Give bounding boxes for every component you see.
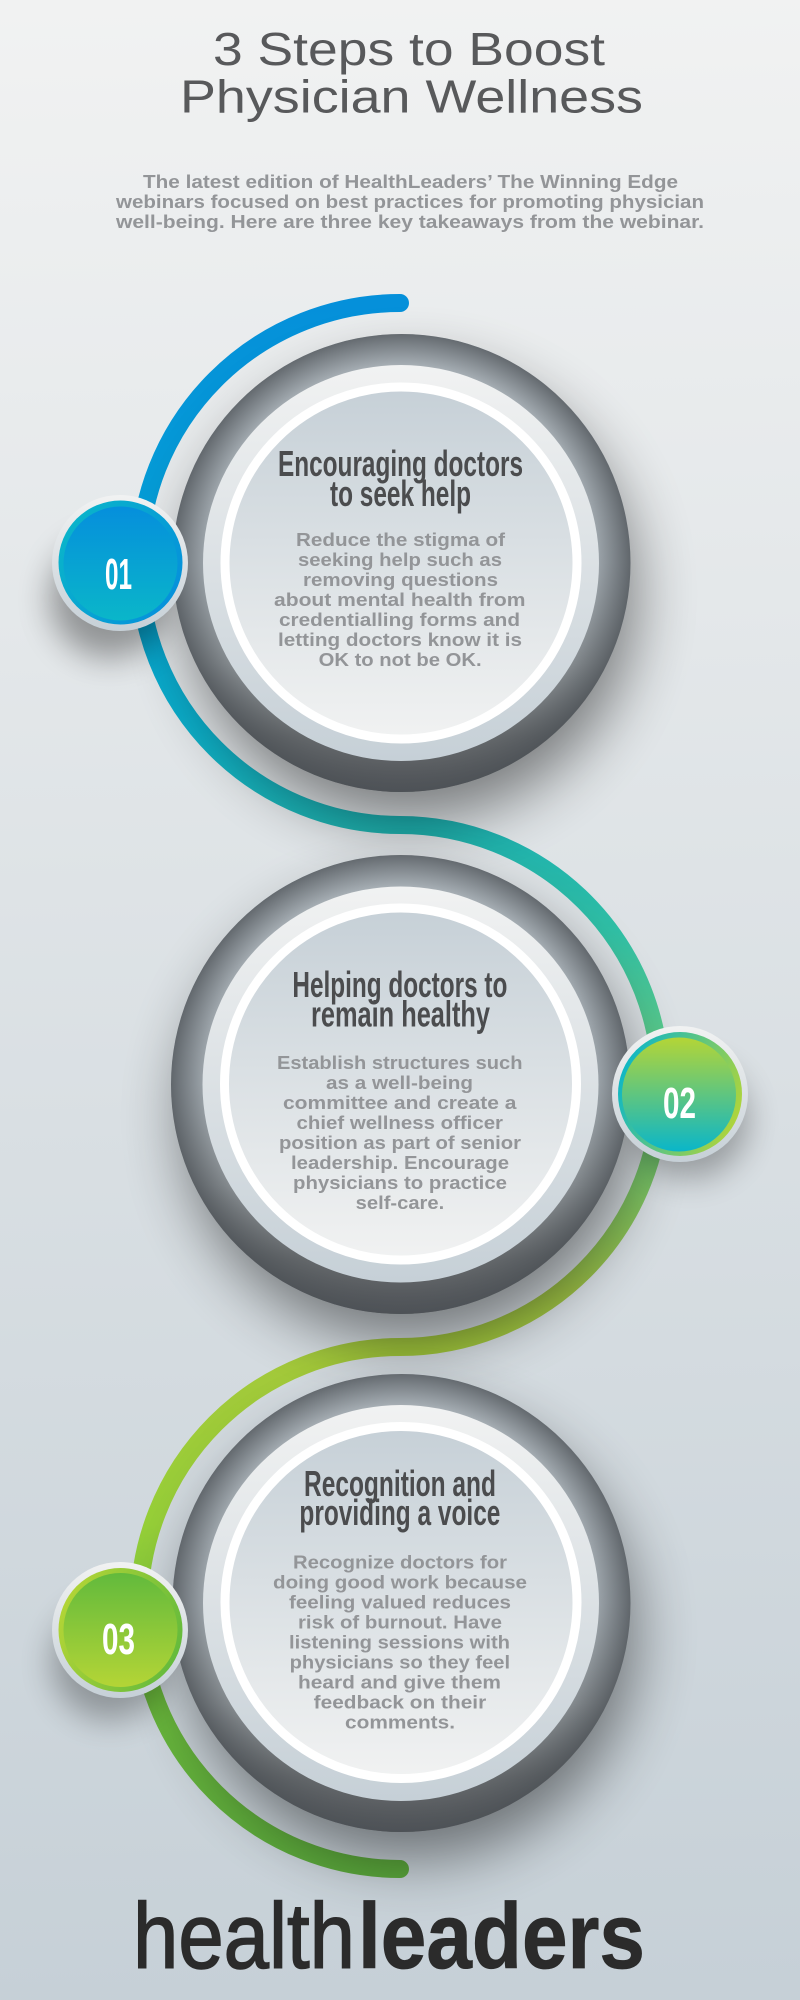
panel: step 3 [52, 1374, 636, 1860]
intro text: well-being. Here are three key takeaways from the webinar. [115, 212, 704, 232]
title: Physician Wellness [180, 70, 643, 122]
logo: healthleaders: health [133, 1884, 355, 1988]
panel: step 1 [50, 334, 636, 820]
body text 1 [274, 530, 526, 670]
body text 3: listening sessions with [289, 1632, 510, 1652]
heading 1: to seek help [330, 473, 471, 514]
body text 2 [277, 1053, 522, 1213]
body text 1: about mental health from [274, 590, 526, 610]
title [180, 23, 643, 122]
panel: step 2 [171, 855, 748, 1341]
body text 3: heard and give them [298, 1672, 501, 1692]
body text 3: physicians so they feel [290, 1652, 510, 1672]
body text 1: letting doctors know it is [278, 630, 522, 650]
badge 01 [52, 495, 188, 631]
intro text: The latest edition of HealthLeaders’ The Winning Edge [143, 172, 678, 192]
logo: healthleaders [133, 1884, 645, 1988]
badge 03 [52, 1562, 188, 1698]
body text 2: chief wellness officer [296, 1113, 503, 1133]
heading 3: providing a voice [299, 1492, 500, 1533]
heading 3 [299, 1463, 500, 1533]
body text 3: feeling valued reduces [289, 1592, 511, 1612]
badge 02: 02 [663, 1079, 696, 1128]
body text 2: position as part of senior [279, 1133, 521, 1153]
body text 3: Recognize doctors for [293, 1552, 507, 1572]
body text 2: self-care. [356, 1193, 444, 1213]
connecting route line [139, 303, 661, 1869]
ring 3 [172, 1374, 630, 1832]
body text 3: doing good work because [273, 1572, 527, 1592]
badge shadow 3 [52, 1604, 168, 1720]
body text 2: leadership. Encourage [291, 1153, 509, 1173]
intro text [115, 172, 704, 232]
body text 2: as a well-being [326, 1073, 473, 1093]
logo: healthleaders: leaders [358, 1884, 645, 1988]
badge 02 [612, 1026, 748, 1162]
body text 2: physicians to practice [293, 1173, 507, 1193]
body text 1: removing questions [303, 570, 498, 590]
heading 2 [292, 964, 507, 1034]
heading 2: remain healthy [311, 994, 490, 1034]
body text 1: Reduce the stigma of [296, 530, 506, 550]
ring 1 [172, 334, 630, 792]
badge 01: 01 [105, 550, 132, 599]
body text 2: committee and create a [283, 1093, 518, 1113]
body text 3 [273, 1552, 527, 1732]
body text 1: credentialling forms and [279, 610, 520, 630]
heading 1: Encouraging doctors [278, 443, 523, 484]
body text 1: seeking help such as [298, 550, 502, 570]
body text 3: feedback on their [314, 1692, 486, 1712]
body text 2: Establish structures such [277, 1053, 522, 1073]
badge 03: 03 [102, 1615, 135, 1664]
body text 1: OK to not be OK. [319, 650, 482, 670]
body text 3: risk of burnout. Have [298, 1612, 502, 1632]
heading 3: Recognition and [304, 1463, 496, 1504]
ring 2 [171, 855, 630, 1314]
heading 1 [278, 443, 523, 514]
heading 2: Helping doctors to [292, 964, 507, 1005]
badge shadow 1 [50, 538, 170, 658]
intro text: webinars focused on best practices for promoting physician [115, 192, 704, 212]
body text 3: comments. [345, 1712, 455, 1732]
badge shadow 2 [632, 1062, 748, 1178]
title: 3 Steps to Boost [213, 23, 605, 75]
